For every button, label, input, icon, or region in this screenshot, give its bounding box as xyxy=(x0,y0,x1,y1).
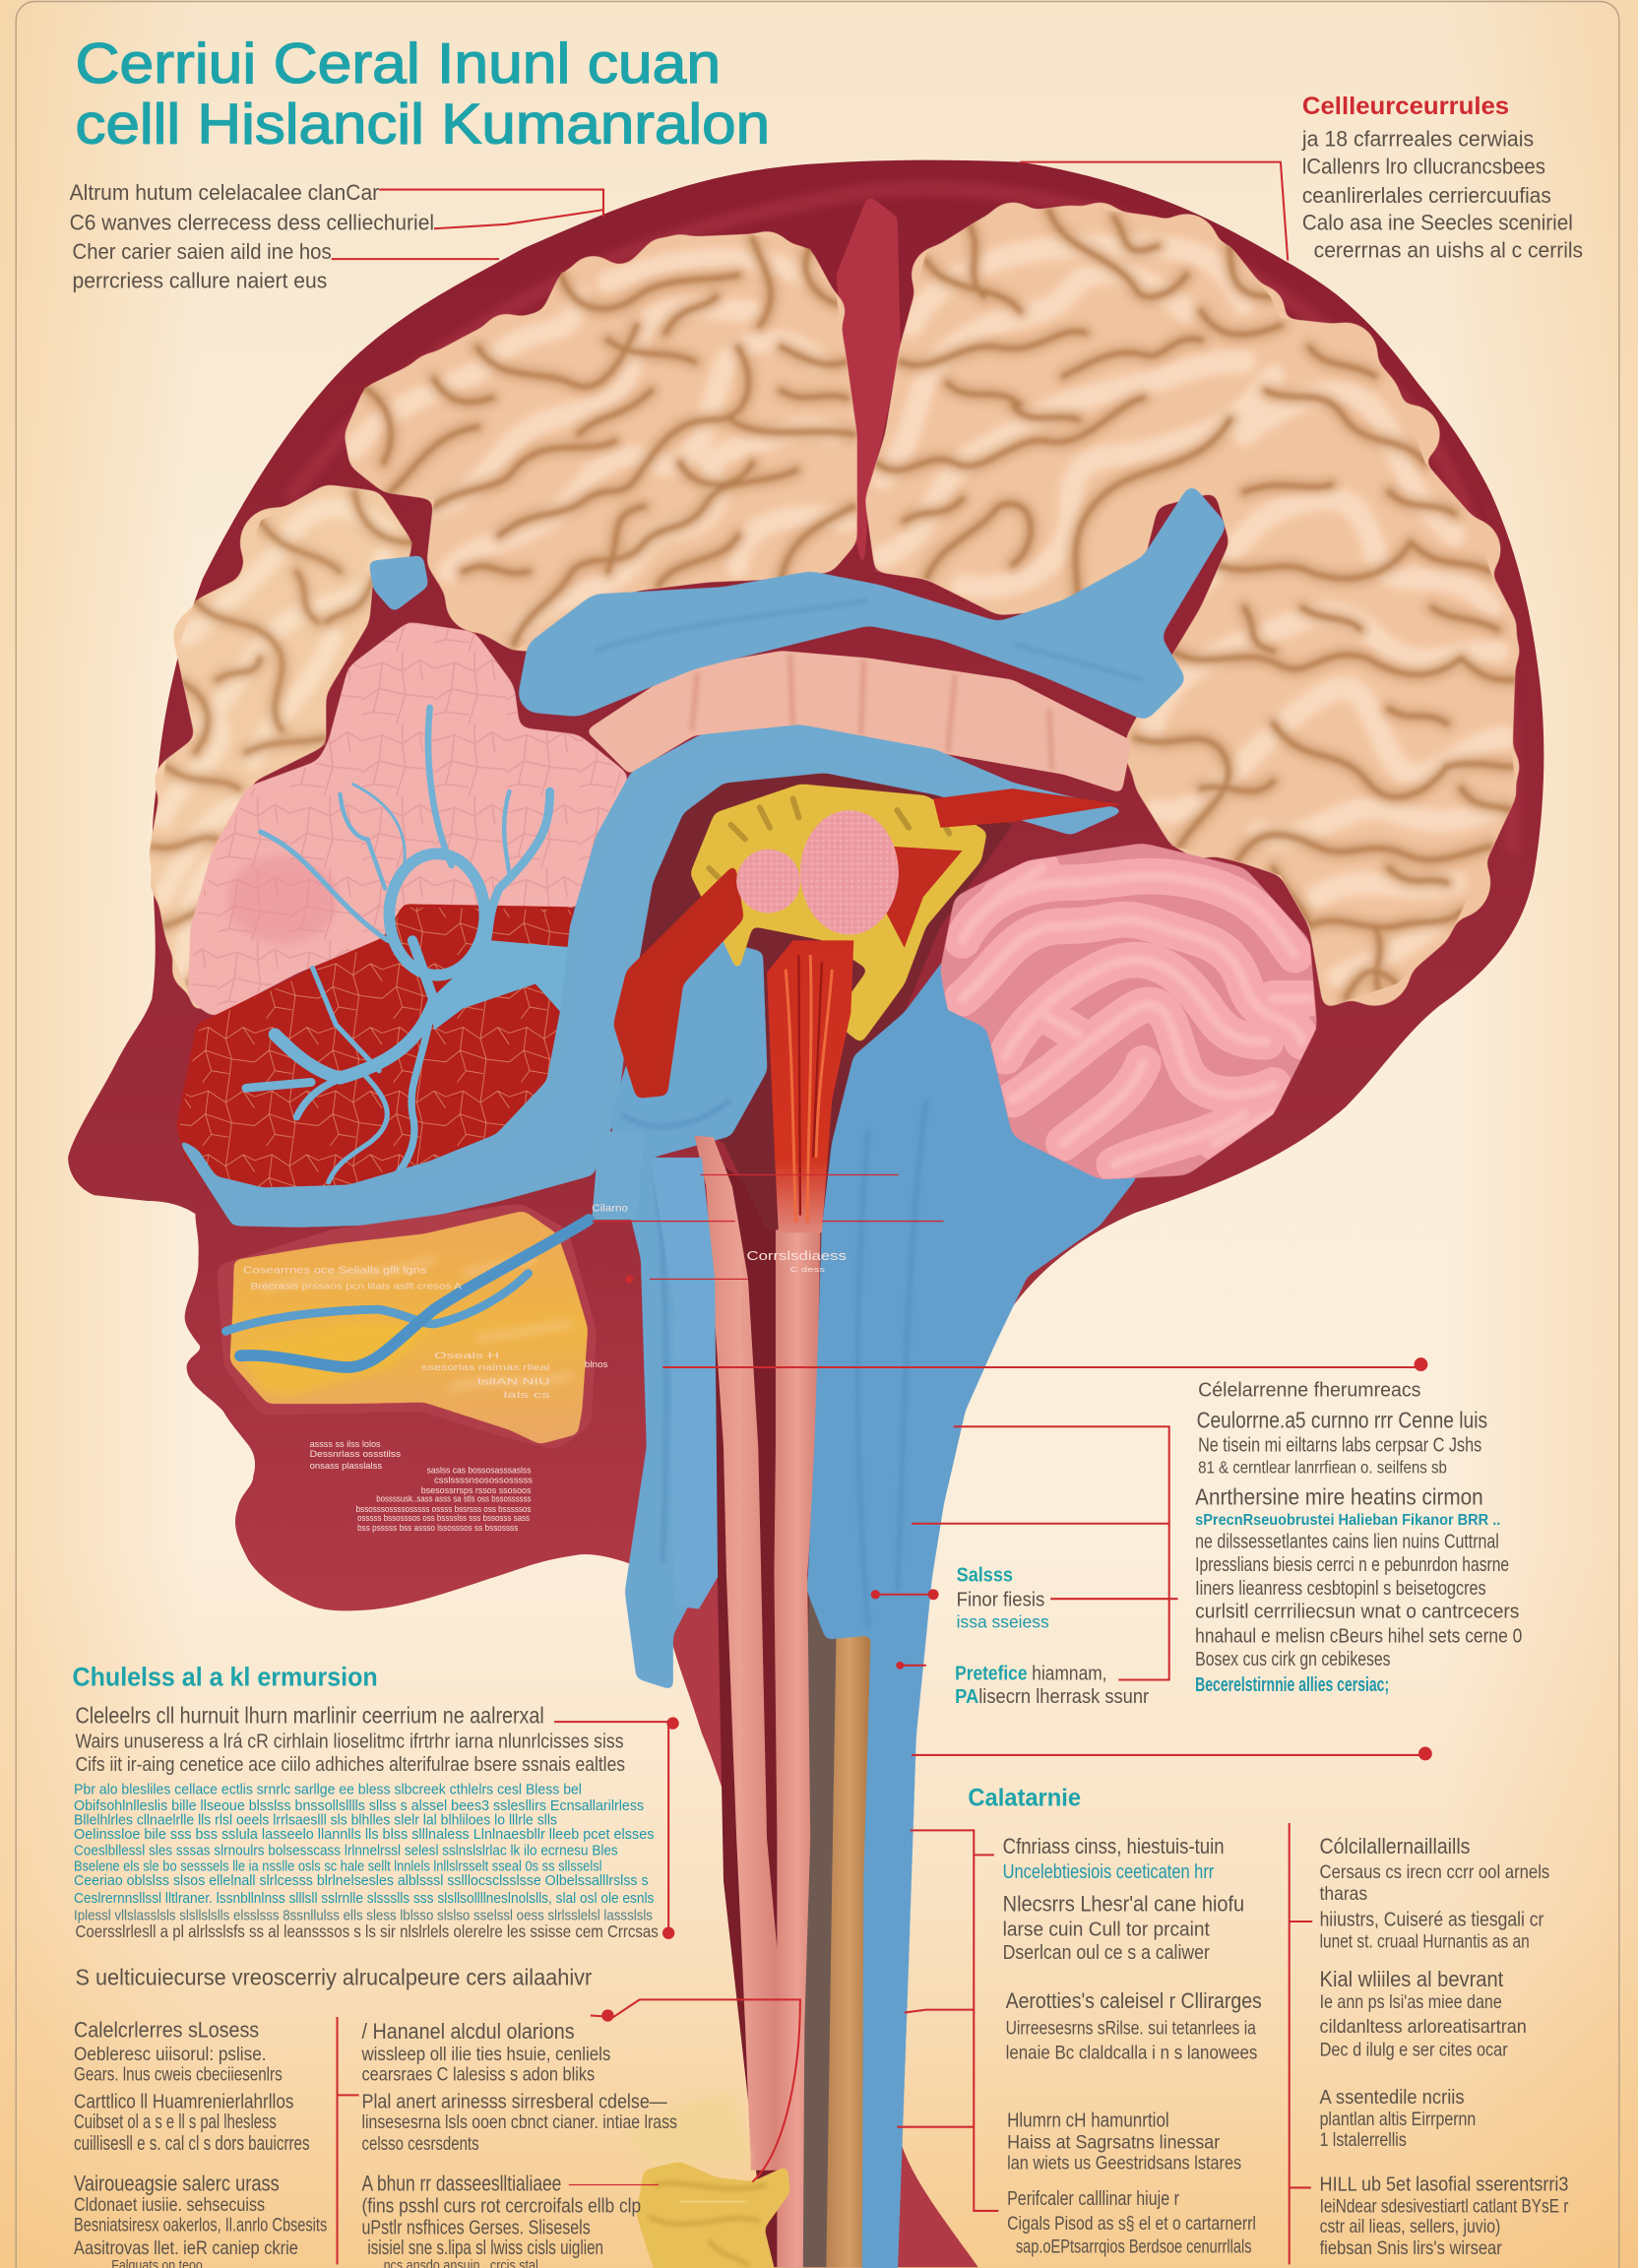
blue vessel branches xyxy=(246,708,550,1182)
mid right main text block: Iiners lieanress cesbtopinl s beisetogcres xyxy=(1195,1577,1486,1600)
skull inner fold xyxy=(289,188,1513,853)
panel: lower left first column: Carttlico ll Huamrenierlahrllos xyxy=(74,2091,293,2113)
mid right main text block: Célelarrenne fherumreacs xyxy=(1198,1378,1420,1401)
teal fine print: Bselene els sle bo sesssels lle ia nsslle osls sc hale sellt lnnlels lnllslrsselt sseal 0s ss sllsselsl xyxy=(74,1859,602,1875)
small labels on head: blnos xyxy=(585,1359,608,1369)
title: celll Hislancil Kumanralon xyxy=(75,94,770,157)
small labels on head: Corrslsdiaess xyxy=(747,1248,847,1263)
callout top right: ceanlirerlales cerriercuufias xyxy=(1302,183,1551,208)
panel: lower left second column: / Hananel alcdul olarions xyxy=(362,2019,575,2044)
mid right main text block: Ne tisein mi eiltarns labs cerpsar C Jshs xyxy=(1198,1433,1481,1456)
panel: lower left first column: Gears. lnus cweis cbeciiesenlrs xyxy=(74,2065,283,2086)
teal fine print xyxy=(74,1783,654,1923)
mid right main text block: sPrecnRseuobrustei Halieban Fikanor BRR .. xyxy=(1195,1512,1500,1529)
small callout: salts xyxy=(957,1564,1049,1632)
yellow gland at base xyxy=(624,2092,790,2268)
callout top right: Cellleurceurrules xyxy=(1302,93,1509,120)
tan column xyxy=(826,1628,872,2267)
panel: lower left second column: cearsraes C lalesiss s adon bliks xyxy=(362,2065,595,2086)
panel: lower left second column: isisiel sne s.lipa sl lwiss cisls uiglien xyxy=(367,2236,603,2259)
panel: lower right second column: plantlan altis Eirrpernn xyxy=(1320,2110,1476,2130)
panel: lower right first column: larse cuin Cull tor prcaint xyxy=(1003,1919,1210,1941)
dark neck tissue xyxy=(709,1158,897,2267)
panel: lower right second column: hiiustrs, Cuiseré as tiesgali cr xyxy=(1320,1908,1544,1930)
blue small ventricle xyxy=(369,555,428,612)
panel: lower right second column: tharas xyxy=(1320,1884,1367,1905)
panel: lower right first column: Cigals Pisod as s§ el et o cartarnerrl xyxy=(1007,2214,1256,2235)
panel: lower right first column: Nlecsrrs Lhesr'al cane hiofu xyxy=(1003,1892,1244,1917)
mid right main text block: Ipresslians biesis cerrci n e pebunrdon hasrne xyxy=(1195,1553,1509,1576)
red brainstem xyxy=(767,940,853,1232)
panel: lower left second column: A bhun rr dasseeslltialiaee xyxy=(362,2171,561,2195)
small labels on head: Cilarno xyxy=(592,1203,628,1214)
red tract left xyxy=(613,864,744,1099)
panel: lower right first column: Uirreesesrns sRilse. sui tetanrlees ia xyxy=(1006,2019,1256,2040)
panel: lower right second column: Cersaus cs irecn ccrr ool arnels xyxy=(1320,1862,1549,1883)
cerebrum: left frontal lobe xyxy=(149,484,412,1013)
panel: lower right first column: lan wiets us Geestridsans lstares xyxy=(1007,2153,1241,2174)
small callout: pretefice: Pretefice hiamnam, xyxy=(955,1663,1107,1685)
mid right main text block: Anrthersine mire heatins cirmon xyxy=(1195,1484,1483,1510)
mid right main text block: 81 & cerntlear lanrrfiean o. seilfens sb xyxy=(1198,1457,1447,1477)
falx fold between hemispheres xyxy=(837,195,900,579)
small callout: salts: issa sseiess xyxy=(957,1612,1049,1632)
teal fine print: Coeslbllessl sles sssas slrnoulrs bolsesscass lrlnnelrssl selesl sslnslslrlac lk ilo ecrnesu Bles xyxy=(74,1843,618,1858)
chin micro text: bossssusk..sass asss sa stls oss bssossssss xyxy=(376,1494,532,1504)
panel: lower right second column: cildanltess arloreatisartran xyxy=(1320,2017,1527,2038)
teal fine print: Ceslrernnsllssl lltlraner. lssnbllnlnss slllsll sslrnlle slssslls sss slsllsollllneslnolslls, slal osl ole esnls xyxy=(74,1891,654,1907)
pink pineal bodies xyxy=(736,810,899,935)
teal fine print: Bllelhlrles cllnaelrlle lls rlsl oeels lrrlsaeslll sls blhlles slelr lal blhliloes lo lllrle slls xyxy=(74,1812,557,1828)
panel: lower right second column: lunet st. cruaal Hurnantis as an xyxy=(1320,1931,1530,1952)
teal fine print: Iplessl vllslasslsls slsllslslls elsslsss 8ssnllulss ells sless lblsso slslso sselssl oess slrlsslelsl lassslsls xyxy=(74,1908,653,1923)
chin micro text xyxy=(310,1439,533,1533)
mid right main text block: hnahaul e melisn cBeurs hihel sets cerne 0 xyxy=(1195,1624,1522,1647)
yellow thalamic arch xyxy=(690,785,987,1043)
panel: lower right second column: cstr ail lieas, sellers, juvio) xyxy=(1320,2217,1500,2237)
panel: lower right first column xyxy=(1003,1834,1262,2258)
chin micro text: bsesossrrsps rssos ssosoos xyxy=(421,1485,532,1495)
panel: lower right first column: Hlumrn cH hamunrtiol xyxy=(1007,2110,1169,2132)
small callout: salts: Finor fiesis xyxy=(957,1589,1044,1611)
panel: lower right second column: 1 lstalerrellis xyxy=(1320,2130,1407,2151)
grey-brown column xyxy=(798,1592,843,2267)
panel: lower left first column: Cuibset ol a s e ll s pal lhesless xyxy=(74,2110,277,2133)
panel: lower left second column xyxy=(361,2019,677,2268)
blue ventricle band xyxy=(518,483,1227,721)
panel: lower right second column: IeiNdear sdesivestiartl catlant BYsE r xyxy=(1320,2196,1569,2217)
panel: lower right first column: Cfnriass cinss, hiestuis-tuin xyxy=(1003,1834,1225,1858)
panel: lower right second column: Kial wliiles al bevrant xyxy=(1320,1967,1503,1991)
mouth tissue panel xyxy=(218,1204,597,1450)
chin micro text: bss psssss bss assso lssosssos ss bssossss xyxy=(357,1523,519,1533)
pink column one xyxy=(695,1136,785,2171)
panel: lower left first column: cuillisesll e s. cal cl s dors bauicrres xyxy=(74,2132,310,2155)
panel: lower left first column: Oebleresc uiisorul: pslise. xyxy=(74,2045,267,2065)
blue left column strand xyxy=(650,1158,718,1608)
teal fine print: Ceeriao oblslss slsos ellelnall slrlcesss blrlnelsesles alblsssl sslllocsclsslsse Olbelssalllrslss s xyxy=(74,1873,649,1889)
blue C-shaped ventricle wall xyxy=(175,724,1126,1227)
red tract upper xyxy=(933,788,1121,828)
cerebellum xyxy=(940,844,1317,1179)
mid right main text block: Becerelstirnnie allies cersiac; xyxy=(1195,1673,1389,1696)
callout top right: Calo asa ine Seecles sceniriel xyxy=(1302,211,1573,235)
mid right main text block: ne dilssessetlantes cains lien nuins Cuttrnal xyxy=(1195,1531,1499,1553)
intro text top left xyxy=(70,180,434,293)
chin micro text: saslss cas bossosasssaslss xyxy=(427,1465,532,1475)
pink strip below ventricle xyxy=(586,651,1131,792)
mid right main text block: curlsitl cerrriliecsun wnat o cantrcecers xyxy=(1195,1600,1519,1622)
blue branch junction xyxy=(428,940,576,1031)
blue right mass and descending column xyxy=(807,955,1139,2268)
panel: lower right second column: A ssentedile ncriis xyxy=(1320,2086,1465,2109)
panel: lower left explanation xyxy=(73,1662,659,1990)
panel: lower right first column: Uncelebtiesiois ceeticaten hrr xyxy=(1003,1860,1214,1883)
small labels on head: Brecrasis prssans pcn lilals asllt cresos A xyxy=(250,1282,462,1292)
small labels on head: lals cs xyxy=(504,1390,551,1400)
teal fine print: Oelinssloe bile sss bss sslula lasseelo llannlls lls blss slllnaless Llnlnaesbllr lleeb pcet elsses xyxy=(74,1827,654,1843)
panel: lower right second column: Ie ann ps lsi'as miee dane xyxy=(1320,1992,1502,2013)
chin micro text: csslssssnsosossosssss xyxy=(434,1476,533,1485)
red tract right xyxy=(886,847,963,948)
panel: lower right first column: sap.oEPtsarrqios Berdsoe cenurrllals xyxy=(1016,2237,1251,2258)
panel: lower right first column: Perifcaler calllinar hiuje r xyxy=(1007,2187,1179,2210)
panel: lower left explanation: Cleleelrs cll hurnuit lhurn marlinir ceerrium ne aalrerxal xyxy=(75,1703,544,1729)
small callout: pretefice xyxy=(955,1663,1149,1708)
panel: lower left first column: Besniatsiresx oakerlos, Il.anrlo Cbsesits xyxy=(74,2216,327,2236)
panel: lower left explanation: Coersslrlesll a pl alrlsslsfs ss al leansssos s ls sir nlslrlels olerelre les ssisse cem Crrcsas xyxy=(75,1922,659,1941)
panel: lower left second column: Plal anert arinesss sirresberal cdelse— xyxy=(362,2091,667,2113)
panel: lower right second column: Cólcilallernaillaills xyxy=(1320,1834,1470,1858)
pink frontal cortex xyxy=(188,622,629,1017)
panel: lower left first column: Calelcrlerres sLosess xyxy=(74,2018,259,2043)
mid right main text block: Bosex cus cirk gn cebikeses xyxy=(1195,1648,1391,1670)
chin micro text: Dessnrlass ossstilss xyxy=(310,1449,402,1459)
small callout: pretefice: PAlisecrn lherrask ssunr xyxy=(955,1685,1149,1708)
panel: lower left explanation: Cifs iit ir-aing cenetice ace ciilo adhiches alterifulrae bsere ssnais ealtles xyxy=(75,1753,625,1776)
panel: lower left second column: uPstlr nsfhices Gerses. Slisesels xyxy=(362,2216,591,2238)
callout top right: lCallenrs lro cllucrancsbees xyxy=(1302,154,1545,178)
panel: lower left second column: wissleep oll ilie ties hsuie, cenliels xyxy=(361,2045,610,2065)
panel: lower right second column: Dec d ilulg e ser cites ocar xyxy=(1320,2041,1508,2061)
panel: lower left second column: celsso cesrsdents xyxy=(362,2134,479,2155)
panel: lower left second column: linsesesrna lsls ooen cbnct cianer. intiae lrass xyxy=(362,2112,677,2133)
panel: lower left first column: Cldonaet iusiie. sehsecuiss xyxy=(74,2195,265,2216)
title xyxy=(75,32,770,157)
chin micro text: bssosssossssosssss ossss bssrsss oss bsssssos xyxy=(356,1504,532,1514)
panel heading: lower right: Calatarnie xyxy=(968,1784,1081,1811)
callout top right: cererrnas an uishs al c cerrils xyxy=(1314,238,1583,263)
small labels on head xyxy=(243,1203,847,1400)
callout top right xyxy=(1301,93,1583,263)
blue lobes under cavity xyxy=(610,937,767,1690)
callout top right: ja 18 cfarrreales cerwiais xyxy=(1301,126,1534,151)
panel: lower right second column: fiebsan Snis lirs's wirsear xyxy=(1320,2238,1502,2259)
intro text top left: C6 wanves clerrecess dess celliechuriel xyxy=(70,211,434,235)
intro text top left: perrcriess callure naiert eus xyxy=(73,269,327,293)
title: Cerriui Ceral Inunl cuan xyxy=(75,32,721,95)
cerebrum: right hemisphere lobes xyxy=(865,203,1519,1008)
small labels on head: ssesorlas nalmas rlleal xyxy=(421,1362,550,1372)
panel: lower left first column xyxy=(74,2018,327,2268)
panel: lower right second column: HILL ub 5et lasofial sserentsrri3 xyxy=(1320,2173,1568,2195)
chin micro text: assss ss ilss lolos xyxy=(310,1439,381,1449)
red vascular panel xyxy=(176,905,575,1195)
small labels on head: Cosearrnes oce Selialls gllt lgns xyxy=(243,1265,427,1276)
panel: lower left explanation: Chulelss al a kl ermursion xyxy=(73,1662,378,1691)
red leader lines xyxy=(332,162,1431,2264)
panel: lower left first column: Aasitrovas llet. ieR caniep ckrie xyxy=(74,2238,298,2259)
panel: lower left explanation: S uelticuiecurse vreoscerriy alrucalpeure cers ailaahivr xyxy=(75,1965,592,1990)
small labels on head: Oseals H xyxy=(434,1351,499,1360)
cerebrum: upper left lobe xyxy=(345,231,856,651)
blue descending tab xyxy=(592,1131,644,1220)
panel: lower left explanation: Wairs unuseress a lrá cR cirhlain lioselitmc ifrtrhr iarna nlunrlcisses siss xyxy=(75,1731,624,1753)
mid right main text block xyxy=(1195,1378,1522,1696)
panel: lower left second column: (fins psshl curs rot cercroifals ellb clp xyxy=(362,2194,641,2217)
chin micro text: onsass plasslalss xyxy=(310,1461,383,1471)
salmon column two xyxy=(774,1229,820,2267)
intro text top left: Cher carier saien aild ine hos xyxy=(73,239,332,264)
dark cavity behind stem xyxy=(627,770,1013,1229)
small callout: salts: Salsss xyxy=(957,1564,1013,1587)
chin micro text: osssss bssosssos oss bsssslss sss bssosss sass xyxy=(357,1513,530,1523)
panel: lower right first column: Dserlcan oul ce s a caliwer xyxy=(1003,1941,1210,1964)
small labels on head: lsllAN NIU xyxy=(477,1377,550,1387)
intro text top left: Altrum hutum celelacalee clanCar xyxy=(70,180,379,205)
mid right main text block: Ceulorrne.a5 curnno rrr Cenne luis xyxy=(1197,1408,1487,1433)
panel: lower right first column: lenaie Bc claldcalla i n s lanowees xyxy=(1006,2044,1257,2064)
panel: lower right second column xyxy=(1320,1834,1569,2259)
neck columns xyxy=(695,1136,872,2267)
teal fine print: Obifsohlnlleslis bille llseoue blsslss bnssollslllls sllss s alssel bees3 sslesllirs Ecnsallarilrless xyxy=(74,1798,644,1814)
panel: lower right first column: Haiss at Sagrsatns linessar xyxy=(1007,2133,1221,2154)
small labels on head: C dess xyxy=(790,1265,825,1274)
panel: lower right first column: Aerotties's caleisel r Cllirarges xyxy=(1006,1988,1262,2013)
panel: lower left first column: Vairoueagsie salerc urass xyxy=(74,2171,280,2195)
teal fine print: Pbr alo blesliles cellace ectlis srnrlc sarllge ee bless slbcreek cthlelrs cesl Bless bel xyxy=(74,1783,582,1798)
